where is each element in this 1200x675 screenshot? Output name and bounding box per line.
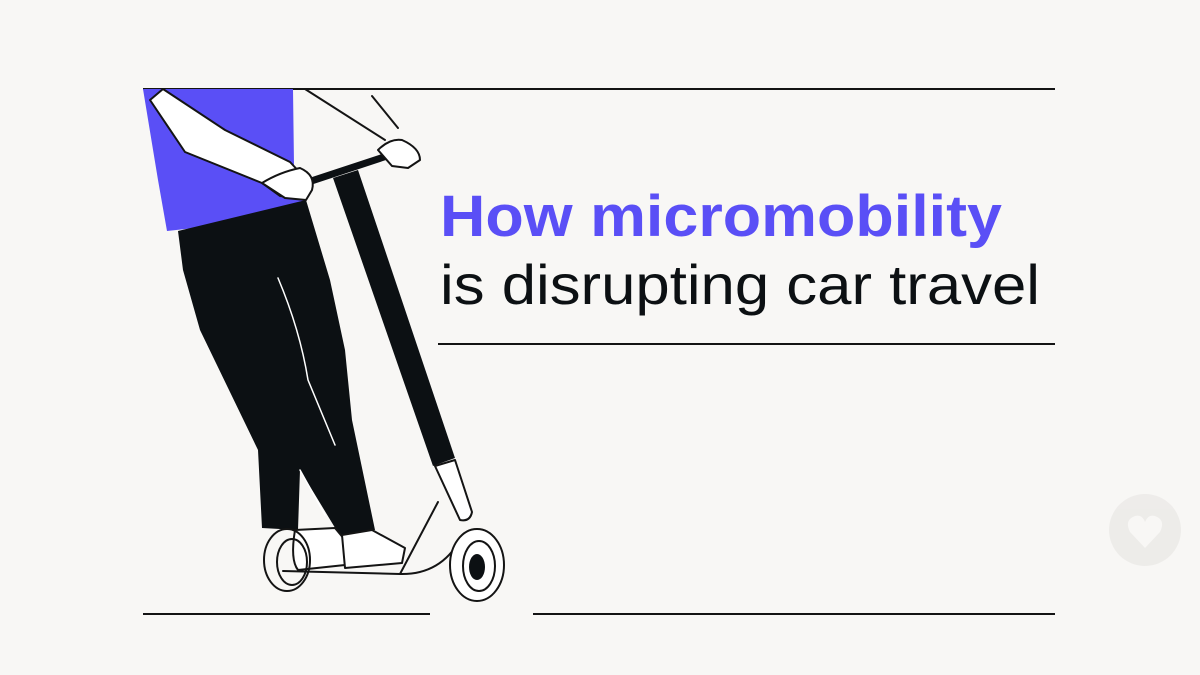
lower stem [435,460,472,520]
title: is disrupting car travel [440,253,1040,316]
scooter stem [333,170,455,466]
illustration: person riding scooter [143,89,504,601]
handlebar [281,154,393,191]
arm [150,89,305,198]
hands [262,168,313,200]
title [440,184,1040,316]
shoes [293,528,345,570]
title: How micromobility [440,184,1002,249]
shirt [143,89,306,231]
icon: logo [1109,494,1181,566]
frame [283,502,460,574]
front wheel [450,529,504,601]
pants [178,200,375,536]
rear wheel [264,529,310,591]
